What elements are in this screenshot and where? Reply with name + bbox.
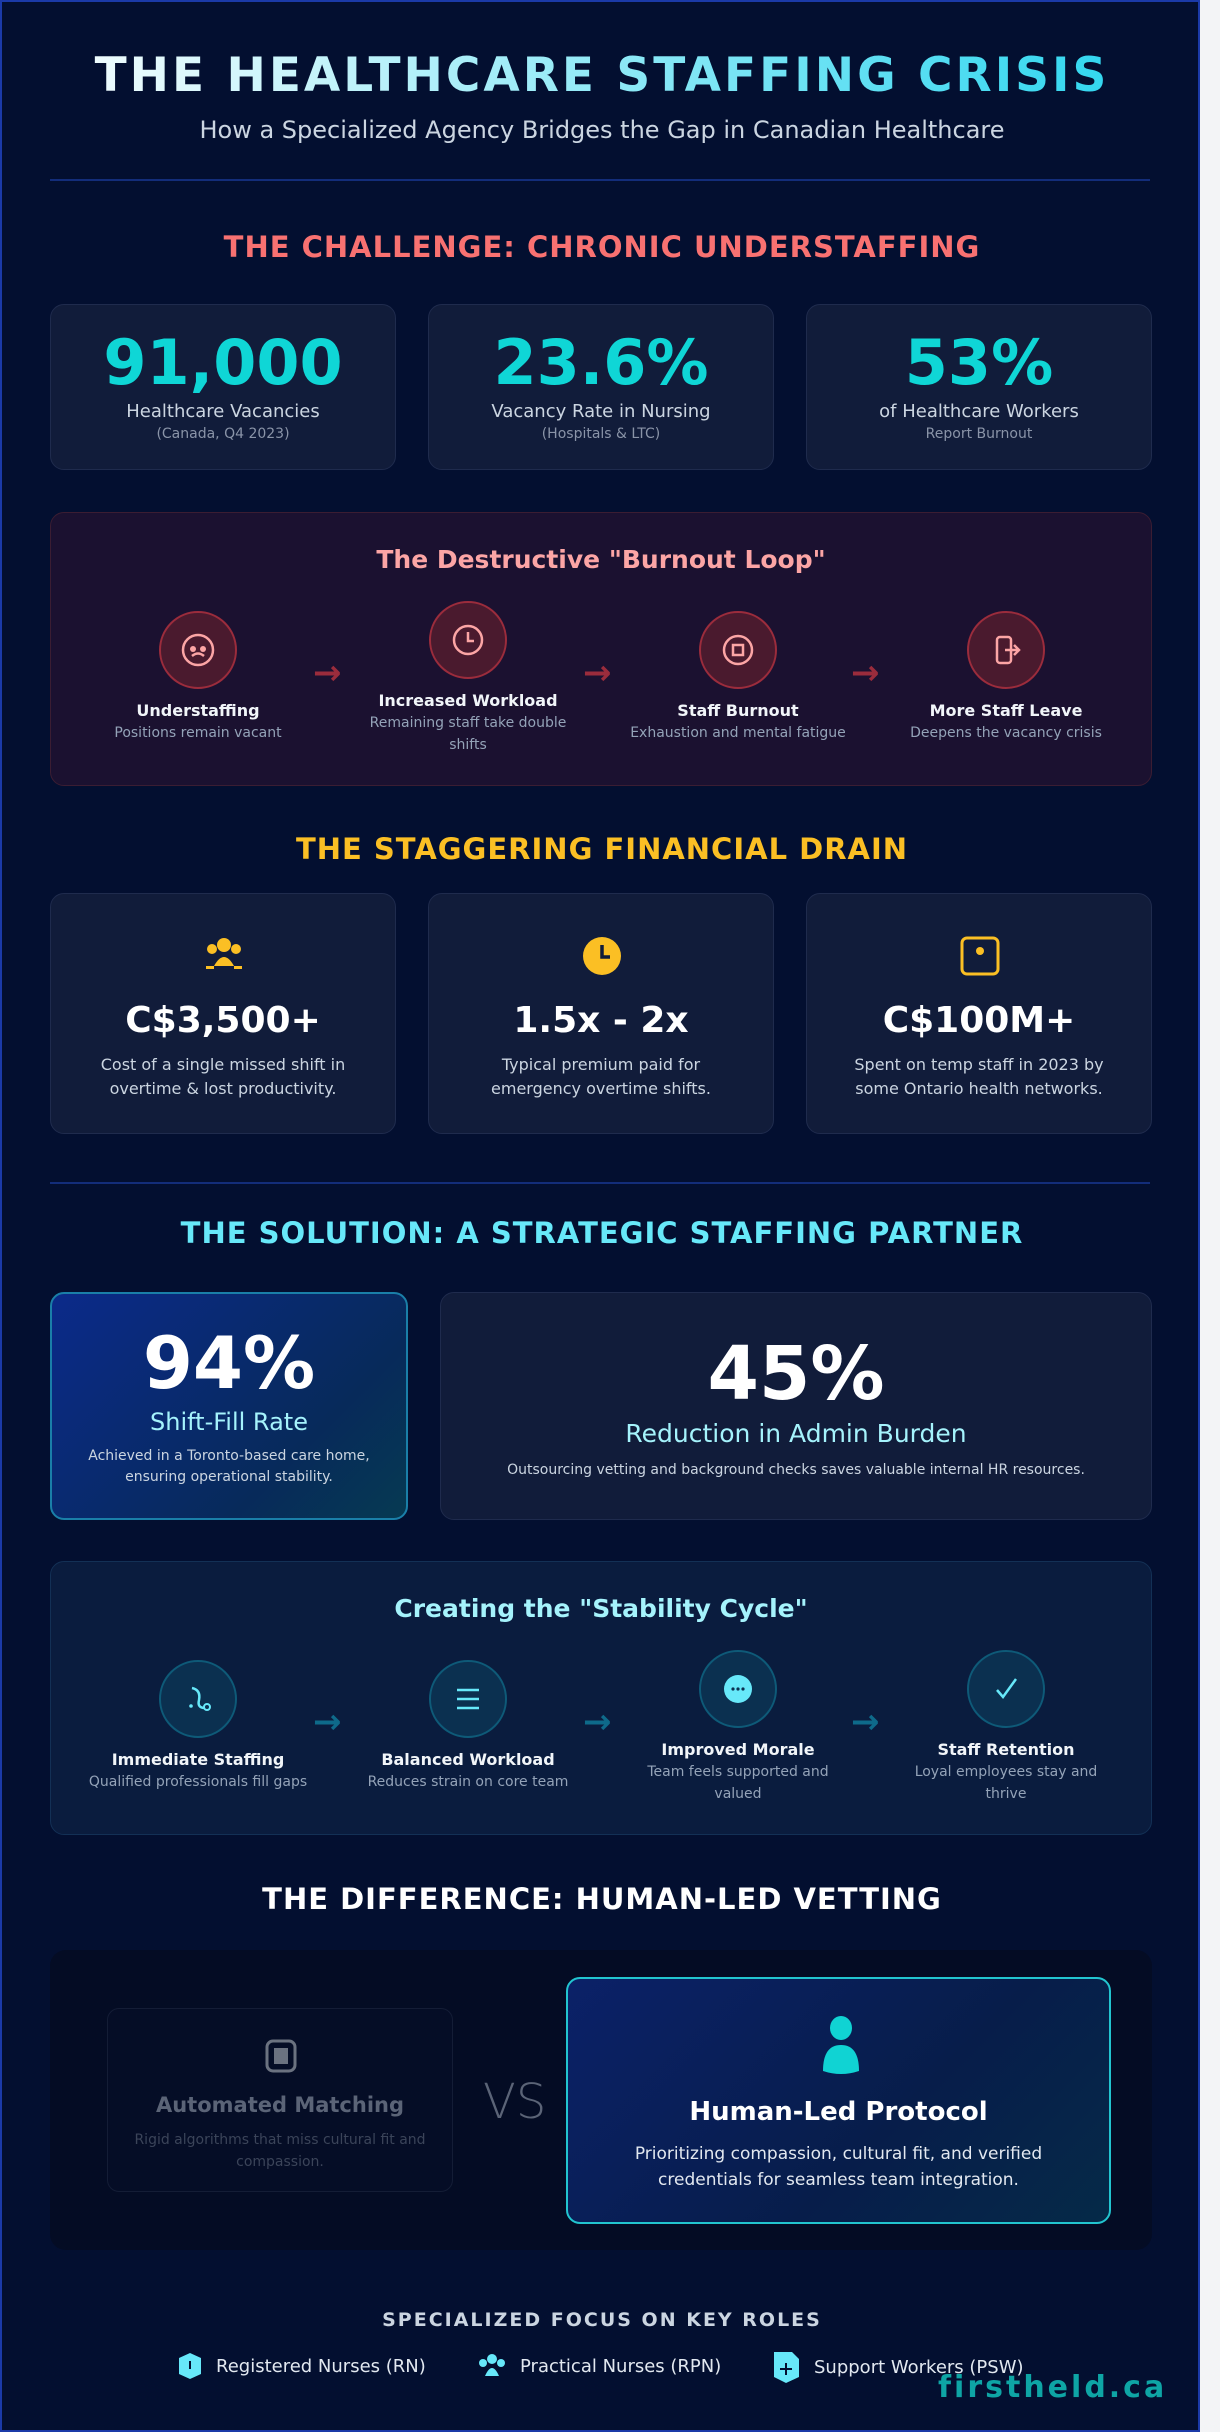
arrow: → — [583, 1702, 612, 1742]
card: human-led protocol: credentials for seamless team integration. — [658, 2170, 1019, 2190]
panel: stability cycle — [50, 1561, 1152, 1835]
stat card: burnout: of Healthcare Workers — [879, 401, 1079, 422]
step: immediate staffing: Qualified professionals fill gaps — [89, 1774, 307, 1790]
step: immediate staffing: Immediate Staffing — [112, 1750, 284, 1769]
card: human-led protocol: Prioritizing compassion, cultural fit, and verified — [635, 2144, 1042, 2164]
card: 94% shift fill — [50, 1292, 408, 1520]
step: balanced workload: Balanced Workload — [381, 1750, 555, 1769]
card: 45% admin: 45% — [707, 1331, 885, 1417]
card: automated matching — [107, 2008, 453, 2192]
arrow: → — [851, 653, 880, 693]
card: automated matching: Rigid algorithms that miss cultural fit and — [134, 2132, 426, 2148]
stat card: burnout — [806, 304, 1152, 470]
step: balanced workload — [368, 1660, 568, 1790]
arrow: → — [313, 1702, 342, 1742]
step: retention: Staff Retention — [937, 1740, 1075, 1759]
arrow: → — [583, 653, 612, 693]
roles list — [179, 2352, 1024, 2383]
stat card: vacancies: Healthcare Vacancies — [126, 401, 320, 422]
stat card: vacancies: 91,000 — [103, 326, 343, 399]
card: temp staff — [806, 893, 1152, 1134]
card: automated matching: compassion. — [236, 2154, 324, 2170]
burnout title: The Destructive "Burnout Loop" — [376, 545, 826, 574]
card: temp staff: C$100M+ — [883, 1000, 1075, 1041]
panel: burnout loop — [50, 512, 1152, 786]
step: morale: Improved Morale — [661, 1740, 815, 1759]
role: PSW — [774, 2352, 1024, 2383]
card: temp staff: Spent on temp staff in 2023 by — [854, 1055, 1104, 1074]
card: missed shift: overtime & lost productivity. — [110, 1079, 336, 1098]
heading: difference: THE DIFFERENCE: HUMAN-LED VETTING — [262, 1882, 942, 1916]
card: premium: Typical premium paid for — [502, 1055, 700, 1074]
step: morale — [647, 1650, 829, 1802]
step: morale: Team feels supported and valued — [647, 1764, 829, 1802]
card: missed shift — [50, 893, 396, 1134]
step: leave — [910, 611, 1102, 741]
card: premium: 1.5x - 2x — [513, 1000, 689, 1041]
stat card: vacancy rate — [428, 304, 774, 470]
step: understaffing: Positions remain vacant — [114, 725, 282, 741]
stat card: vacancy rate: 23.6% — [493, 326, 709, 399]
card: 94% shift fill: ensuring operational stability. — [125, 1469, 333, 1485]
card: 94% shift fill: Shift-Fill Rate — [150, 1408, 308, 1436]
step: workload: Increased Workload — [378, 691, 558, 710]
card: 45% admin: Outsourcing vetting and background checks saves valuable internal HR resources. — [507, 1462, 1085, 1478]
card: temp staff: some Ontario health networks. — [855, 1079, 1103, 1098]
panel: comparison — [50, 1950, 1152, 2250]
card: 94% shift fill: Achieved in a Toronto-based care home, — [88, 1448, 370, 1464]
card: 94% shift fill: 94% — [143, 1321, 315, 1405]
step: leave: More Staff Leave — [930, 701, 1082, 720]
stat card: burnout: 53% — [905, 326, 1053, 399]
heading: challenge: THE CHALLENGE: CHRONIC UNDERSTAFFING — [224, 230, 980, 264]
card: missed shift: C$3,500+ — [125, 1000, 321, 1041]
step: retention — [915, 1650, 1097, 1802]
card: human-led protocol — [566, 1977, 1111, 2224]
step: understaffing — [114, 611, 282, 741]
subtitle: How a Specialized Agency Bridges the Gap in Canadian Healthcare — [199, 116, 1005, 144]
card: 45% admin: Reduction in Admin Burden — [625, 1419, 967, 1448]
stability title: Creating the "Stability Cycle" — [394, 1594, 808, 1623]
title: THE HEALTHCARE STAFFING CRISIS — [95, 48, 1109, 103]
brand: firstheld.ca: firstheld.ca — [938, 2370, 1167, 2405]
stat card: burnout: Report Burnout — [926, 426, 1032, 442]
step: workload: Remaining staff take double shifts — [370, 715, 566, 753]
card: premium — [428, 893, 774, 1134]
role: PSW: Support Workers (PSW) — [814, 2356, 1024, 2378]
step: retention: Loyal employees stay and thrive — [915, 1764, 1097, 1802]
role: RPN: Practical Nurses (RPN) — [520, 2356, 721, 2376]
step: balanced workload: Reduces strain on core team — [368, 1774, 568, 1790]
card: human-led protocol: Human-Led Protocol — [689, 2097, 988, 2127]
role: RN: Registered Nurses (RN) — [216, 2356, 426, 2376]
card: premium: emergency overtime shifts. — [491, 1079, 711, 1098]
heading: financial drain: THE STAGGERING FINANCIAL DRAIN — [296, 832, 908, 866]
step: leave: Deepens the vacancy crisis — [910, 725, 1102, 741]
stat card: vacancies: (Canada, Q4 2023) — [156, 426, 290, 442]
vs label: VS — [483, 2074, 546, 2130]
step: burnout: Exhaustion and mental fatigue — [630, 725, 846, 741]
step: immediate staffing — [89, 1660, 307, 1790]
arrow: → — [851, 1702, 880, 1742]
arrow: → — [313, 653, 342, 693]
card: 45% admin — [440, 1292, 1152, 1520]
stat card: vacancies — [50, 304, 396, 470]
heading: solution: THE SOLUTION: A STRATEGIC STAFFING PARTNER — [181, 1216, 1023, 1250]
stat card: vacancy rate: Vacancy Rate in Nursing — [491, 401, 711, 422]
stat card: vacancy rate: (Hospitals & LTC) — [542, 426, 660, 442]
card: automated matching: Automated Matching — [156, 2093, 404, 2117]
heading: key roles: SPECIALIZED FOCUS ON KEY ROLES — [382, 2309, 822, 2331]
step: burnout — [630, 611, 846, 741]
step: workload — [370, 601, 566, 753]
card: missed shift: Cost of a single missed shift in — [101, 1055, 345, 1074]
step: burnout: Staff Burnout — [677, 701, 799, 720]
step: understaffing: Understaffing — [136, 701, 260, 720]
role: RN — [179, 2353, 426, 2379]
